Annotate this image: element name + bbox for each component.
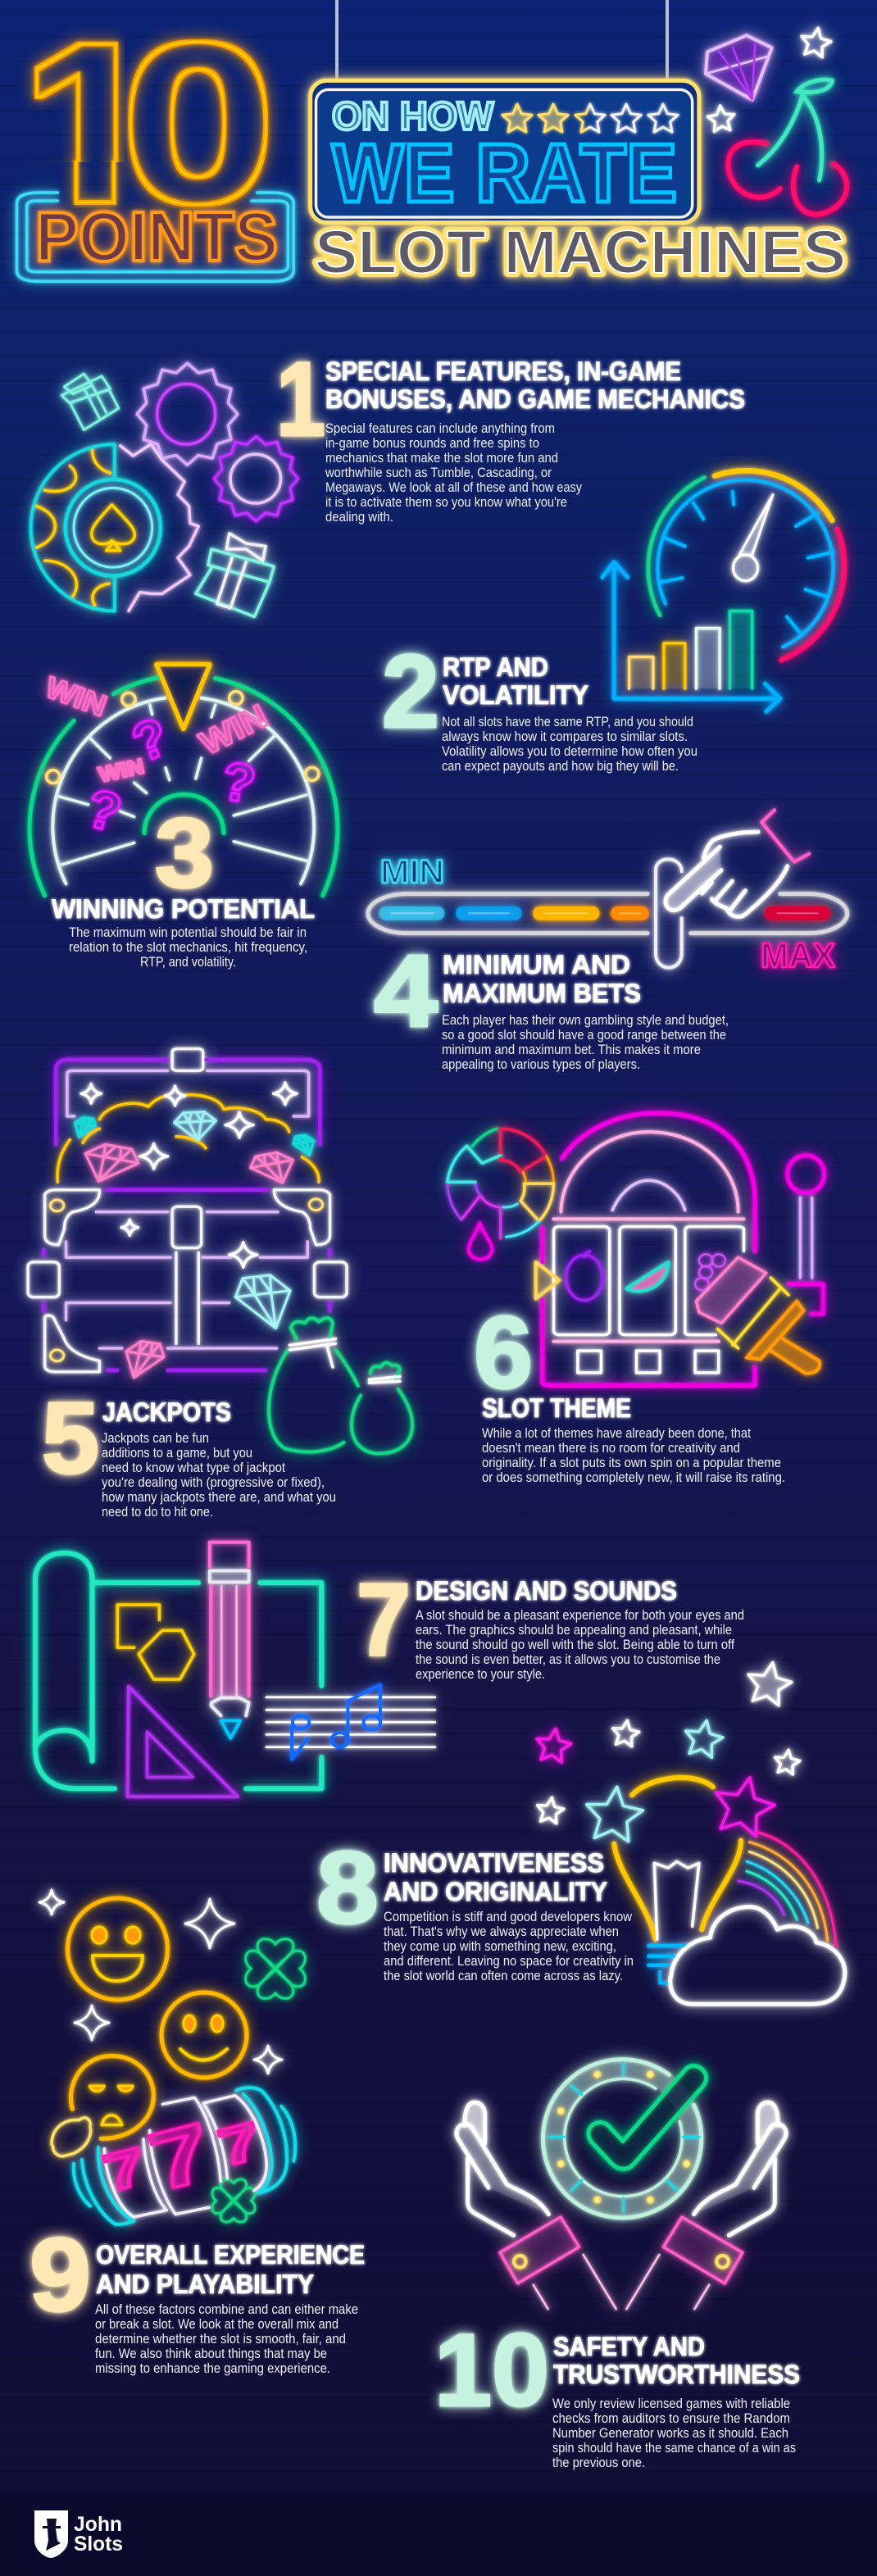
heading	[553, 2332, 800, 2389]
heading	[96, 2240, 365, 2299]
body text: fun. We also think about things that may be	[95, 2347, 327, 2361]
hanging sign wires	[337, 0, 667, 82]
icon: diamond	[706, 35, 772, 100]
body text: need to do to hit one.	[102, 1505, 213, 1520]
heading: SLOT THEME	[482, 1393, 631, 1423]
section 7: design and sounds	[35, 1542, 744, 1797]
body text: experience to your style.	[416, 1667, 545, 1682]
body text: Megaways. We look at all of these and how easy	[325, 480, 583, 495]
body text: missing to enhance the gaming experience.	[95, 2361, 330, 2376]
illustration: prize wheel: WIN	[96, 753, 146, 787]
illustration: bet slider and hand: MIN	[380, 854, 444, 890]
logo: john slots: Slots	[74, 2533, 123, 2556]
heading: SAFETY AND	[553, 2332, 705, 2361]
heading: AND ORIGINALITY	[384, 1877, 607, 1906]
illustration: bet slider and hand: MAX	[761, 936, 835, 975]
body text: how many jackpots there are, and what you	[102, 1490, 336, 1505]
body text: RTP, and volatility.	[140, 955, 236, 970]
illustration: chip, gears and gifts	[31, 363, 298, 616]
heading: INNOVATIVENESS	[384, 1848, 604, 1878]
logo: john slots: John	[74, 2513, 122, 2536]
illustration: prize wheel: WIN	[41, 670, 111, 723]
body text: Volatility allows you to determine how often you	[442, 744, 698, 759]
body text	[384, 1910, 634, 1983]
footer	[0, 2493, 877, 2576]
sign: on how we rate: WE RATE	[332, 128, 677, 220]
number 7: 7	[357, 1563, 411, 1677]
body text: the previous one.	[552, 2456, 645, 2470]
heading: WINNING POTENTIAL	[52, 894, 315, 924]
illustration: prize wheel: ?	[124, 706, 176, 774]
section 10: safety and trustworthiness	[434, 2060, 800, 2470]
section 5: jackpots	[28, 1049, 412, 1520]
number 9: 9	[30, 2216, 91, 2333]
body text: ears. The graphics should be appealing and pleasant, while	[416, 1623, 732, 1638]
body text: mechanics that make the slot more fun and	[325, 451, 558, 466]
body text: We only review licensed games with reliable	[552, 2397, 790, 2411]
section 4: minimum and maximum bets	[368, 810, 847, 1072]
header	[16, 0, 847, 286]
body text: the sound should go well with the slot. Being able to turn off	[416, 1638, 734, 1652]
body text: spin should have the same chance of a win as	[552, 2441, 796, 2456]
body text: Not all slots have the same RTP, and you should	[442, 715, 693, 729]
title: slot machines: SLOT MACHINES	[315, 218, 846, 286]
illustration: smileys and 777 reels: 7	[212, 2110, 266, 2178]
illustration: prize wheel: ?	[217, 749, 260, 815]
body text: in-game bonus rounds and free spins to	[325, 436, 539, 451]
body text: Number Generator works as it should. Each	[552, 2426, 788, 2441]
body text: it is to activate them so you know what you're	[325, 495, 567, 510]
body text: additions to a game, but you	[102, 1446, 252, 1461]
body text: determine whether the slot is smooth, fair, and	[95, 2332, 346, 2347]
number 8: 8	[316, 1831, 379, 1945]
illustration: slot machine, colour wheel and paintbrush	[448, 1113, 825, 1385]
body text: can expect payouts and how big they will be.	[442, 759, 679, 774]
illustration: hands holding checkmark badge	[457, 2060, 786, 2309]
body text: or break a slot. We look at the overall mix and	[95, 2317, 339, 2332]
body text: All of these factors combine and can either make	[95, 2302, 358, 2317]
number 4: 4	[374, 934, 438, 1048]
heading	[443, 652, 588, 710]
body text: minimum and maximum bet. This makes it more	[442, 1043, 701, 1057]
illustration: light bulb, rainbow, cloud and stars	[534, 1659, 845, 2004]
body text	[95, 2302, 358, 2376]
illustration: bet slider and hand	[368, 810, 847, 975]
heading: BONUSES, AND GAME MECHANICS	[325, 384, 745, 414]
body text: dealing with.	[325, 510, 393, 525]
number 1: 1	[276, 341, 325, 458]
heading: MINIMUM AND	[443, 950, 630, 979]
illustration: smileys and 777 reels	[39, 1890, 305, 2224]
heading	[384, 1848, 607, 1906]
body text: or does something completely new, it will raise its rating.	[482, 1470, 785, 1485]
body text: you're dealing with (progressive or fixed),	[102, 1475, 325, 1490]
section 8: innovativeness and originality	[316, 1659, 845, 2004]
header: SLOT MACHINES	[315, 218, 846, 286]
number 10: 10	[434, 2314, 549, 2428]
body text: so a good slot should have a good range between the	[442, 1028, 726, 1043]
number 2: 2	[382, 634, 439, 749]
heading: VOLATILITY	[443, 680, 588, 710]
illustration: treasure chest and money bags	[28, 1049, 412, 1453]
body text: originality. If a slot puts its own spin on a popular theme	[482, 1456, 781, 1470]
sign: on how we rate: ON HOW	[332, 95, 494, 139]
title: 10: 0	[121, 0, 275, 249]
heading: AND PLAYABILITY	[96, 2269, 314, 2299]
body text: need to know what type of jackpot	[102, 1461, 285, 1475]
body text: Competition is stiff and good developers know	[384, 1910, 632, 1924]
illustration: smileys and 777 reels: 7	[98, 2136, 152, 2203]
body text: appealing to various types of players.	[442, 1057, 640, 1072]
body text	[442, 715, 698, 774]
body text: Special features can include anything from	[325, 421, 555, 436]
heading: JACKPOTS	[102, 1397, 231, 1427]
body text	[69, 925, 307, 970]
body text: While a lot of themes have already been done, that	[482, 1426, 751, 1441]
illustration: smileys and 777 reels: 7	[141, 2106, 220, 2209]
icon: stars	[707, 25, 833, 132]
sign: on how we rate	[311, 80, 699, 223]
body text	[416, 1608, 744, 1682]
title: 10	[21, 26, 280, 216]
heading: OVERALL EXPERIENCE	[96, 2240, 365, 2269]
heading: TRUSTWORTHINESS	[553, 2360, 800, 2389]
body text: checks from auditors to ensure the Random	[552, 2411, 790, 2426]
number 6: 6	[474, 1296, 533, 1410]
body text	[552, 2397, 796, 2470]
section 6: slot theme	[448, 1113, 825, 1485]
heading	[325, 357, 745, 414]
body text: they come up with something new, exciting,	[384, 1939, 616, 1954]
section 2: rtp and volatility	[382, 470, 844, 774]
body text: Each player has their own gambling style and budget,	[442, 1013, 729, 1028]
body text: and different. Leaving no space for creativity in	[384, 1954, 634, 1969]
illustration: prize wheel: WIN	[194, 698, 274, 762]
body text	[325, 421, 583, 525]
body text: doesn't mean there is no room for creativity and	[482, 1441, 740, 1456]
section 1: special features	[31, 341, 745, 616]
heading: MAXIMUM BETS	[443, 979, 641, 1008]
heading	[443, 950, 641, 1008]
body text: the slot world can often come across as lazy.	[384, 1969, 623, 1983]
heading: DESIGN AND SOUNDS	[416, 1576, 677, 1606]
icon: cherries	[728, 80, 847, 215]
body text: the sound is even better, as it allows you to customise the	[416, 1652, 720, 1667]
illustration: prize wheel	[30, 665, 338, 896]
section 9: overall experience and playability	[30, 1890, 365, 2376]
section 3: winning potential	[30, 665, 338, 970]
body text: worthwhile such as Tumble, Cascading, or	[325, 466, 552, 480]
body text: always know how it compares to similar slots.	[442, 729, 688, 744]
illustration: blueprint, pencil and music notes	[35, 1542, 435, 1797]
body text: Jackpots can be fun	[102, 1431, 209, 1446]
body text: that. That's why we always appreciate when	[384, 1924, 619, 1939]
illustration: gauge and bar chart	[602, 470, 844, 711]
title: 10: 1	[21, 0, 161, 249]
number 3: 3	[155, 798, 214, 908]
rating stars	[502, 104, 678, 132]
illustration: prize wheel: ?	[80, 777, 128, 844]
heading: SPECIAL FEATURES, IN-GAME	[325, 357, 681, 386]
logo: john slots	[34, 2510, 123, 2558]
body text	[482, 1426, 785, 1485]
body text	[102, 1431, 336, 1520]
title box: points: POINTS	[35, 198, 278, 276]
body text	[442, 1013, 729, 1072]
number 5: 5	[42, 1383, 99, 1495]
body text: The maximum win potential should be fair in	[69, 925, 307, 940]
heading: RTP AND	[443, 652, 548, 682]
body text: relation to the slot mechanics, hit frequency,	[69, 940, 307, 955]
body text: A slot should be a pleasant experience for both your eyes and	[416, 1608, 744, 1623]
